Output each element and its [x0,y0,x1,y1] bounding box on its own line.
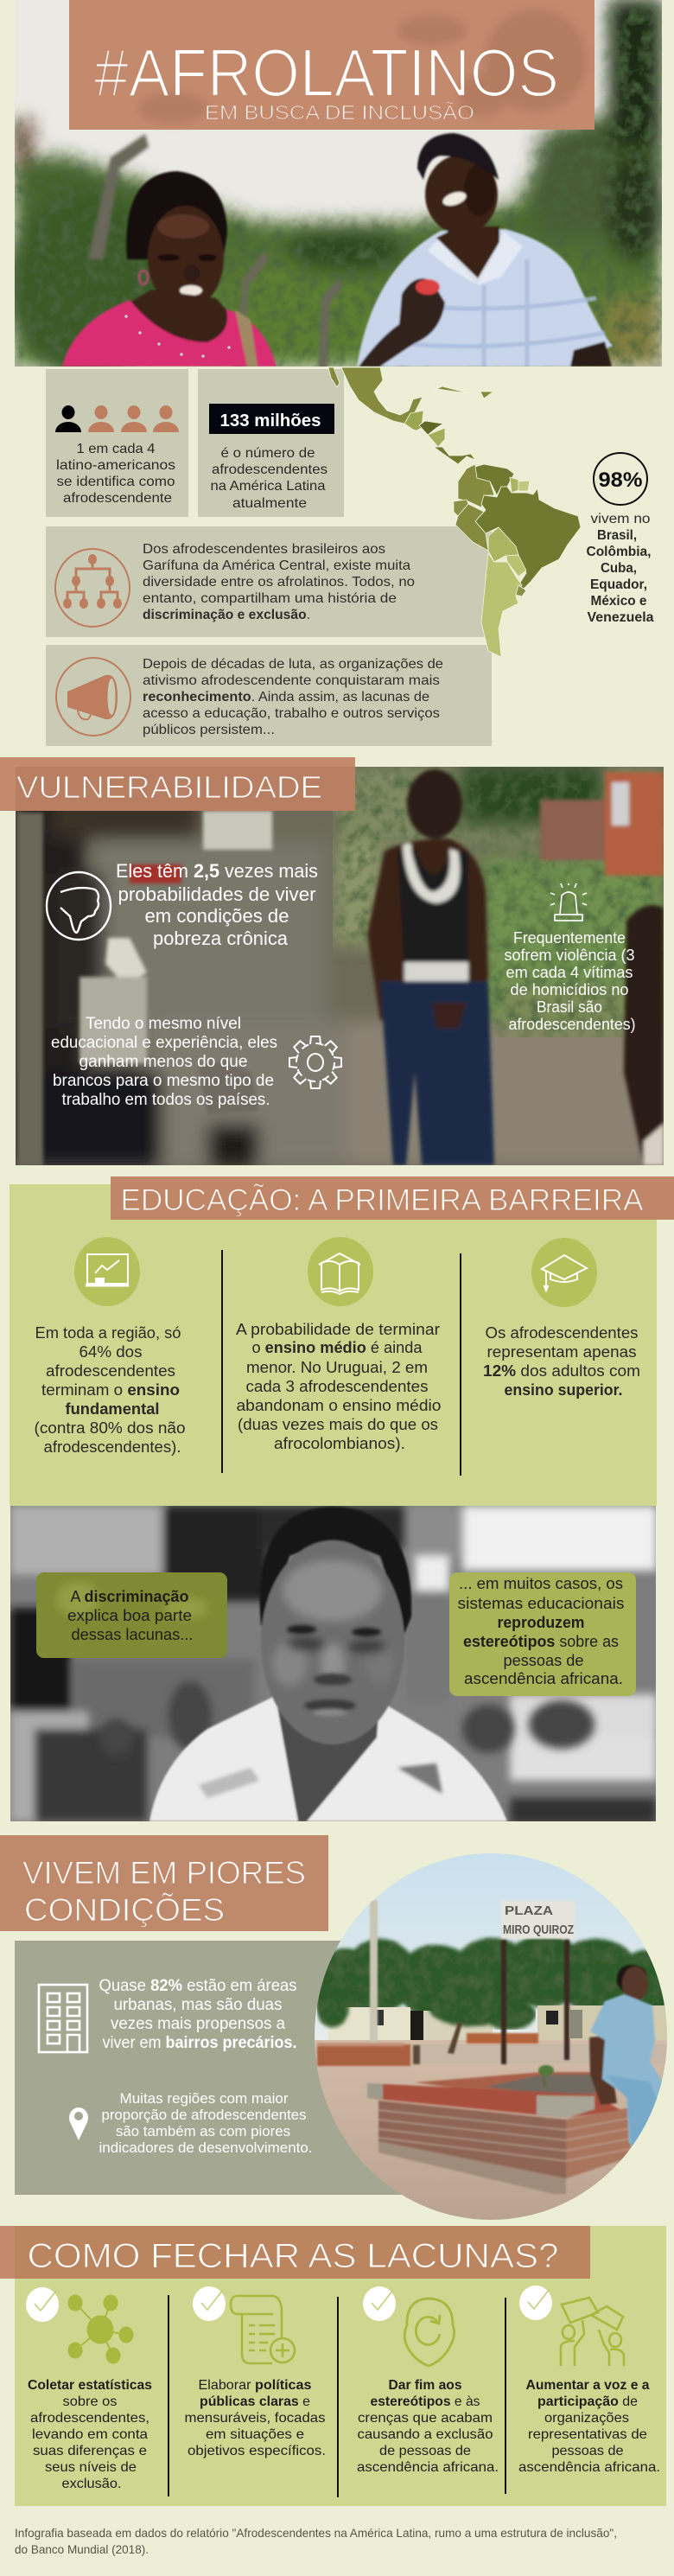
text: voice: organizações [544,2411,629,2426]
text: urban [99,1977,297,2052]
sign text: MIRO QUIROZ [503,1922,574,1937]
text: diversity: entanto, compartilham uma história de [143,591,397,606]
text: voice: Aumentar a voz e a [525,2378,650,2393]
text: poverty [116,860,318,949]
icon: people holding signs [561,2298,624,2366]
text: number of people: na América Latina [211,479,326,494]
icon: thumbs down [47,872,111,940]
icon: graduation cap [531,1238,597,1307]
icon: network [68,2295,133,2363]
subtitle: EM BUSCA DE INCLUSÃO [205,101,474,124]
text: countries [586,512,654,625]
photo: woman at the plaza, oval [311,1850,674,2222]
icon: location pin [69,2107,88,2140]
text: policies: objetivos específicos. [188,2444,326,2458]
text: diversity: Garífuna da América Central, existe muita [143,558,410,573]
icon: chalkboard [74,1237,140,1306]
text: countries: Cuba, [601,561,637,576]
text: primary school: Em toda a região, só [35,1324,181,1342]
text: voice: pessoas de [551,2444,624,2458]
heading banner: vulnerabilidade: VULNERABILIDADE [16,769,322,805]
column: stereotypes [357,2286,499,2475]
panel: diversity [46,526,492,637]
text: secondary school: o ensino médio é ainda [252,1339,423,1356]
footer: source: Infografia baseada em dados do relatório "Afrodescendentes na América Latina, rumo a uma estrutura de inclusão", [15,2526,617,2540]
title: #AFROLATINOS [94,35,559,111]
panel: education [10,1176,674,1506]
text: violence: sofrem violência (3 [505,947,634,964]
icon: check [193,2286,226,2321]
number badge [209,404,334,434]
text: primary school: fundamental [66,1400,159,1418]
text: higher education: representam apenas [487,1343,636,1361]
text: number of people [211,446,327,511]
face shading [272,1559,394,1687]
text: recognition [143,657,443,737]
text: stereotypes: crenças que acabam [358,2411,493,2426]
callout: stereotypes: pessoas de [503,1652,584,1669]
text: policies: em situações e [206,2427,304,2442]
text: one in four: 1 em cada 4 [76,442,156,456]
callout: 98%: 98% [598,469,643,492]
text: policies [185,2378,326,2458]
text: number of people: é o número de [221,446,315,461]
text: violence [505,929,636,1033]
man [357,229,613,367]
text: statistics: sobre os [62,2394,118,2409]
text: recognition: ativismo afrodescendente conquistaram mais [143,673,440,688]
heading banner: vulnerabilidade [0,757,355,811]
text: violence: em cada 4 vítimas [506,964,633,981]
text: countries: Colômbia, [586,545,652,559]
text: statistics: afrodescendentes, [30,2411,149,2426]
text: voice [518,2378,660,2475]
column: voice [518,2286,660,2475]
text: higher education: Os afrodescendentes [486,1324,638,1342]
woman [126,171,227,259]
text: voice: ascendência africana. [518,2460,660,2475]
text: policies: públicas claras e [200,2394,310,2409]
text: countries: México e [591,594,647,609]
divider [337,2297,339,2497]
text: primary school: afrodescendentes). [43,1438,181,1456]
heading banner: education: EDUCAÇÃO: A PRIMEIRA BARREIRA [121,1183,644,1217]
number badge: 133 milhões [219,411,321,430]
text: statistics [28,2378,152,2491]
sign text [503,1906,574,1936]
heading banner: living conditions: CONDIÇÕES [24,1892,225,1928]
icon: book [308,1237,373,1306]
text: voice: representativas de [528,2427,647,2442]
divider [460,1253,461,1476]
woman figure [407,769,462,838]
text: wages: Tendo o mesmo nível [86,1015,241,1033]
footer: source: do Banco Mundial (2018). [15,2542,149,2556]
text: policies: mensuráveis, focadas [185,2411,325,2426]
text: secondary school: A probabilidade de terminar [236,1321,440,1338]
text: policies: Elaborar políticas [199,2378,312,2393]
text: primary school: afrodescendentes [46,1362,175,1380]
divider [221,1250,223,1473]
text: recognition: públicos persistem... [143,723,275,737]
text: statistics: exclusão. [62,2477,121,2491]
text: recognition: Depois de décadas de luta, as organizações de [143,657,443,672]
callout: discrimination [36,1572,227,1658]
divider [505,2298,506,2494]
icon: gear [289,1036,341,1088]
column: statistics [26,2287,152,2491]
trees [316,1935,665,2013]
text: secondary school [236,1321,441,1452]
callout: discrimination: A discriminação [71,1588,188,1605]
text: secondary school: (duas vezes mais do que os [238,1416,438,1433]
text: regions: são também as com piores [116,2123,290,2139]
text: voice: participação de [537,2394,638,2409]
heading banner: closing the gaps [0,2226,590,2279]
foliage on the right [333,767,665,1037]
text: diversity [143,542,415,622]
text: statistics: suas diferenças e [33,2444,147,2458]
text: number of people: afrodescendentes [212,462,327,477]
heading banner: living conditions [0,1835,328,1931]
planter [415,2072,605,2096]
icon: check [26,2287,59,2322]
text: poverty: Eles têm 2,5 vezes mais [116,860,318,882]
text: one in four: latino-americanos [56,458,175,473]
callout: stereotypes: ... em muitos casos, os [459,1575,623,1592]
text: countries: Venezuela [588,610,654,625]
text: secondary school: cada 3 afrodescendentes [245,1378,429,1395]
panel: living conditions [15,1941,406,2195]
text: poverty: em condições de [145,905,289,927]
photo: woman standing, vulnerability [16,767,665,1167]
map: Latin America [328,367,581,657]
icon: siren [550,883,587,921]
text: recognition: acesso a educação, trabalho e outros serviços [143,706,440,721]
text: regions: Muitas regiões com maior [119,2090,289,2107]
callout: 98% [594,453,647,505]
icon: hierarchy [55,549,130,627]
column: policies [185,2286,326,2458]
title banner [69,0,595,130]
text: secondary school: menor. No Uruguai, 2 em [246,1359,428,1376]
text: urban: urbanas, mas são duas [114,1996,282,2014]
text: wages: brancos para o mesmo tipo de [53,1072,274,1090]
icon: head with refresh arrow [404,2299,455,2366]
text: primary school: 64% dos [79,1343,142,1361]
text: violence: afrodescendentes) [508,1016,636,1033]
text: primary school: (contra 80% dos não [35,1419,185,1437]
icon: four people, one black [55,405,179,432]
text: stereotypes [357,2378,499,2475]
panel: 1 in 4 [46,369,188,517]
text: stereotypes: estereótipos e às [370,2394,480,2409]
text: diversity: discriminação e exclusão. [143,608,310,622]
callout: stereotypes [449,1572,636,1696]
panel: recognition [46,645,492,746]
text: poverty: pobreza crônica [153,928,289,949]
text: secondary school: afrocolombianos). [274,1435,405,1452]
text: poverty: probabilidades de viver [118,883,316,905]
callout: stereotypes: ascendência africana. [464,1670,623,1687]
text: primary school: terminam o ensino [41,1381,180,1399]
text: violence: Brasil são [537,998,602,1016]
sign text: PLAZA [505,1903,553,1918]
callout: stereotypes: sistemas educacionais [458,1595,624,1612]
text: statistics: Coletar estatísticas [28,2378,152,2393]
text: countries: Equador, [590,577,647,592]
text: diversity: Dos afrodescendentes brasileiros aos [143,542,385,557]
text: statistics: seus níveis de [45,2460,137,2475]
text: violence: Frequentemente [513,929,626,947]
text: one in four: afrodescendente [63,491,172,506]
text: stereotypes: causando a exclusão [358,2427,493,2442]
panel: 133 million [198,369,344,517]
callout: discrimination: dessas lacunas... [71,1626,194,1643]
icon: check [519,2286,552,2320]
text: regions: proporção de afrodescendentes [102,2107,306,2123]
text: countries: vivem no [591,512,651,526]
panel: closing the gaps [0,2226,666,2506]
callout: discrimination: explica boa parte [67,1607,192,1624]
text: stereotypes: ascendência africana. [357,2460,499,2475]
text: stereotypes: de pessoas de [379,2444,471,2458]
heading banner: closing the gaps: COMO FECHAR AS LACUNAS? [28,2237,558,2275]
text: violence: de homicídios no [510,981,629,998]
text: wages: trabalho em todos os países. [62,1091,270,1109]
icon: scroll with plus [231,2296,295,2363]
text: wages: educacional e experiência, eles [51,1034,277,1052]
woman [617,1965,646,1993]
hero photo: two people laughing [4,0,664,380]
text: urban: viver em bairros precários. [102,2034,297,2052]
text: regions: indicadores de desenvolvimento. [99,2139,313,2156]
text: primary school [35,1324,185,1456]
text: secondary school: abandonam o ensino médio [237,1397,441,1414]
text: one in four [56,442,175,506]
text: number of people: atualmente [232,496,307,511]
text: one in four: se identifica como [57,475,175,489]
divider [168,2295,169,2496]
callout: stereotypes: estereótipos sobre as [463,1633,619,1650]
text: wages [51,1015,277,1109]
callout: stereotypes: reproduzem [498,1614,584,1631]
text: statistics: levando em conta [32,2427,148,2442]
text: urban: vezes mais propensos a [111,2015,285,2033]
text: urban: Quase 82% estão em áreas [99,1977,297,1995]
text: diversity: diversidade entre os afrolatinos. Todos, no [143,575,415,590]
text: higher education [483,1324,640,1399]
text: higher education: ensino superior. [505,1381,622,1399]
text: wages: ganham menos do que [79,1053,247,1071]
icon: megaphone [56,658,130,736]
icon: building [39,1985,87,2052]
icon: check [363,2286,396,2321]
heading banner: living conditions: VIVEM EM PIORES [22,1855,306,1891]
text: higher education: 12% dos adultos com [483,1362,640,1380]
text: recognition: reconhecimento. Ainda assim, as lacunas de [143,690,429,705]
text: countries: Brasil, [597,528,637,543]
footer: source [15,2526,617,2556]
photo: teacher in classroom [10,1506,657,1824]
text: stereotypes: Dar fim aos [389,2378,462,2393]
text: regions [99,2090,313,2156]
